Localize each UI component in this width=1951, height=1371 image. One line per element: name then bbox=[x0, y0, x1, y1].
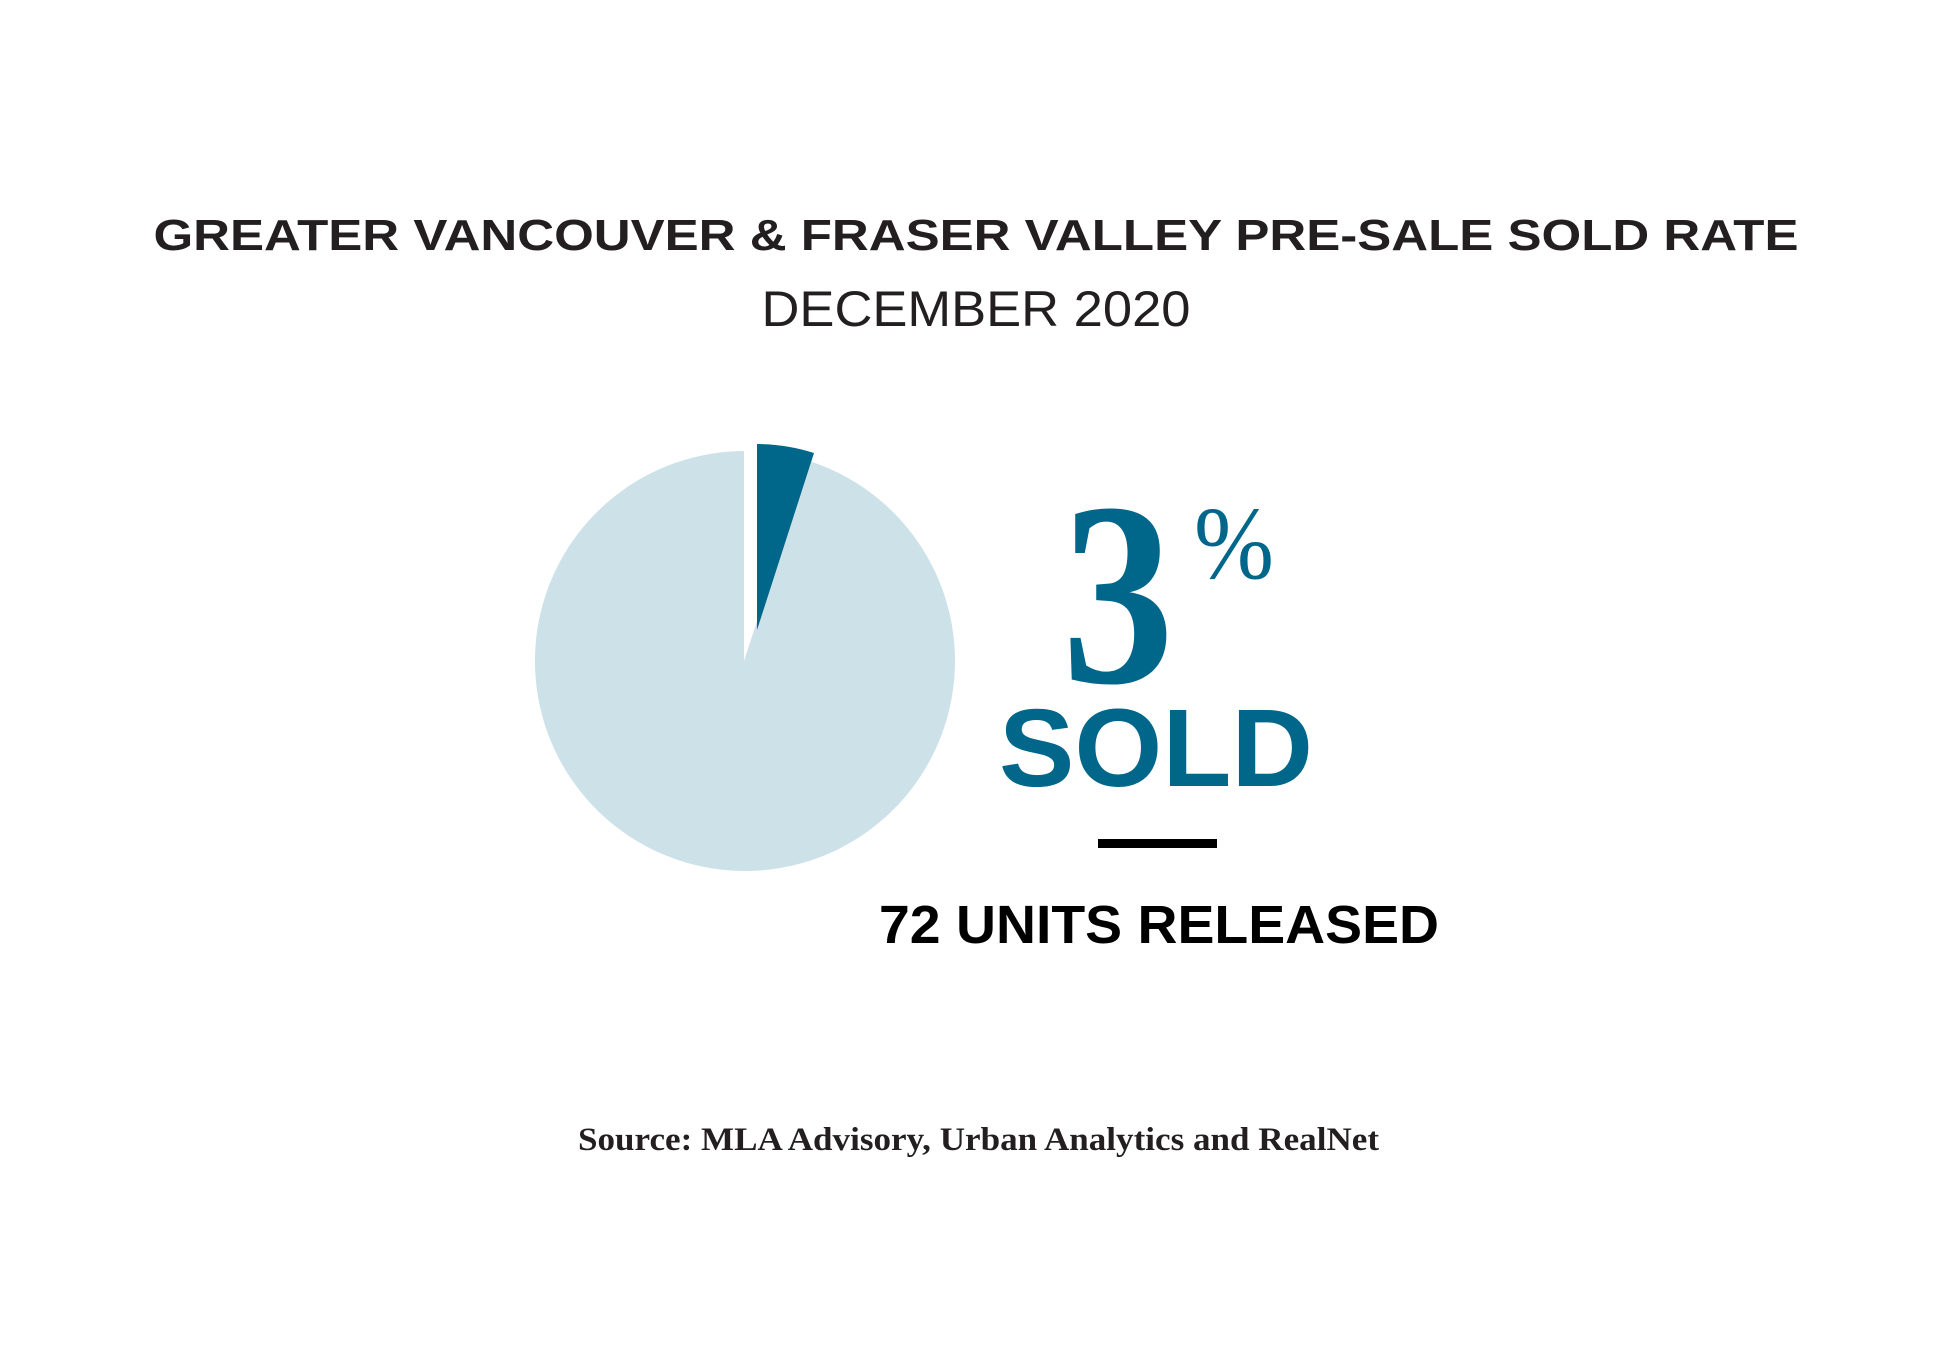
source: Source: MLA Advisory, Urban Analytics and RealNet bbox=[578, 1122, 1379, 1158]
big percent number: % bbox=[1194, 486, 1274, 601]
pie: sold slice bbox=[757, 444, 814, 630]
SOLD label: SOLD bbox=[999, 687, 1313, 810]
subtitle: DECEMBER 2020 bbox=[762, 281, 1190, 337]
units released: 72 UNITS RELEASED bbox=[879, 895, 1439, 955]
title: GREATER VANCOUVER & FRASER VALLEY PRE-SALE SOLD RATE bbox=[154, 211, 1798, 260]
big percent number bbox=[1062, 449, 1274, 739]
pie: unsold portion bbox=[535, 451, 955, 871]
big percent number: 3 bbox=[1062, 449, 1174, 739]
divider line bbox=[1098, 839, 1217, 848]
pie chart bbox=[535, 444, 955, 871]
